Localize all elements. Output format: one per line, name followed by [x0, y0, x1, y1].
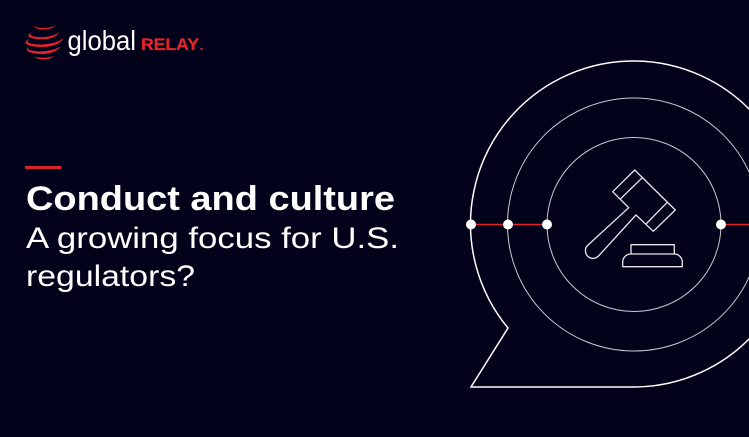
title: Conduct and culture — [26, 180, 395, 218]
middle ring — [508, 98, 749, 351]
logo word: global: global — [68, 25, 136, 56]
sound block base — [623, 254, 682, 267]
gavel head band left — [620, 178, 642, 199]
subtitle line 2: regulators? — [26, 260, 195, 293]
logo word: RELAY: RELAY — [141, 35, 200, 54]
speech bubble outline — [471, 61, 749, 387]
subtitle line 1: A growing focus for U.S. — [26, 222, 399, 255]
red connector lines — [471, 224, 749, 226]
gavel head and handle — [585, 170, 675, 258]
subtitle — [26, 222, 399, 293]
registered mark — [200, 48, 203, 50]
icon: red striped globe — [26, 26, 63, 59]
connector dots — [466, 220, 726, 230]
inner ring — [547, 138, 721, 312]
sound block top — [631, 245, 674, 254]
icon: gavel — [585, 170, 682, 267]
gavel head band right — [646, 202, 667, 224]
logo: Global Relay — [26, 25, 203, 59]
accent rule — [25, 166, 62, 169]
